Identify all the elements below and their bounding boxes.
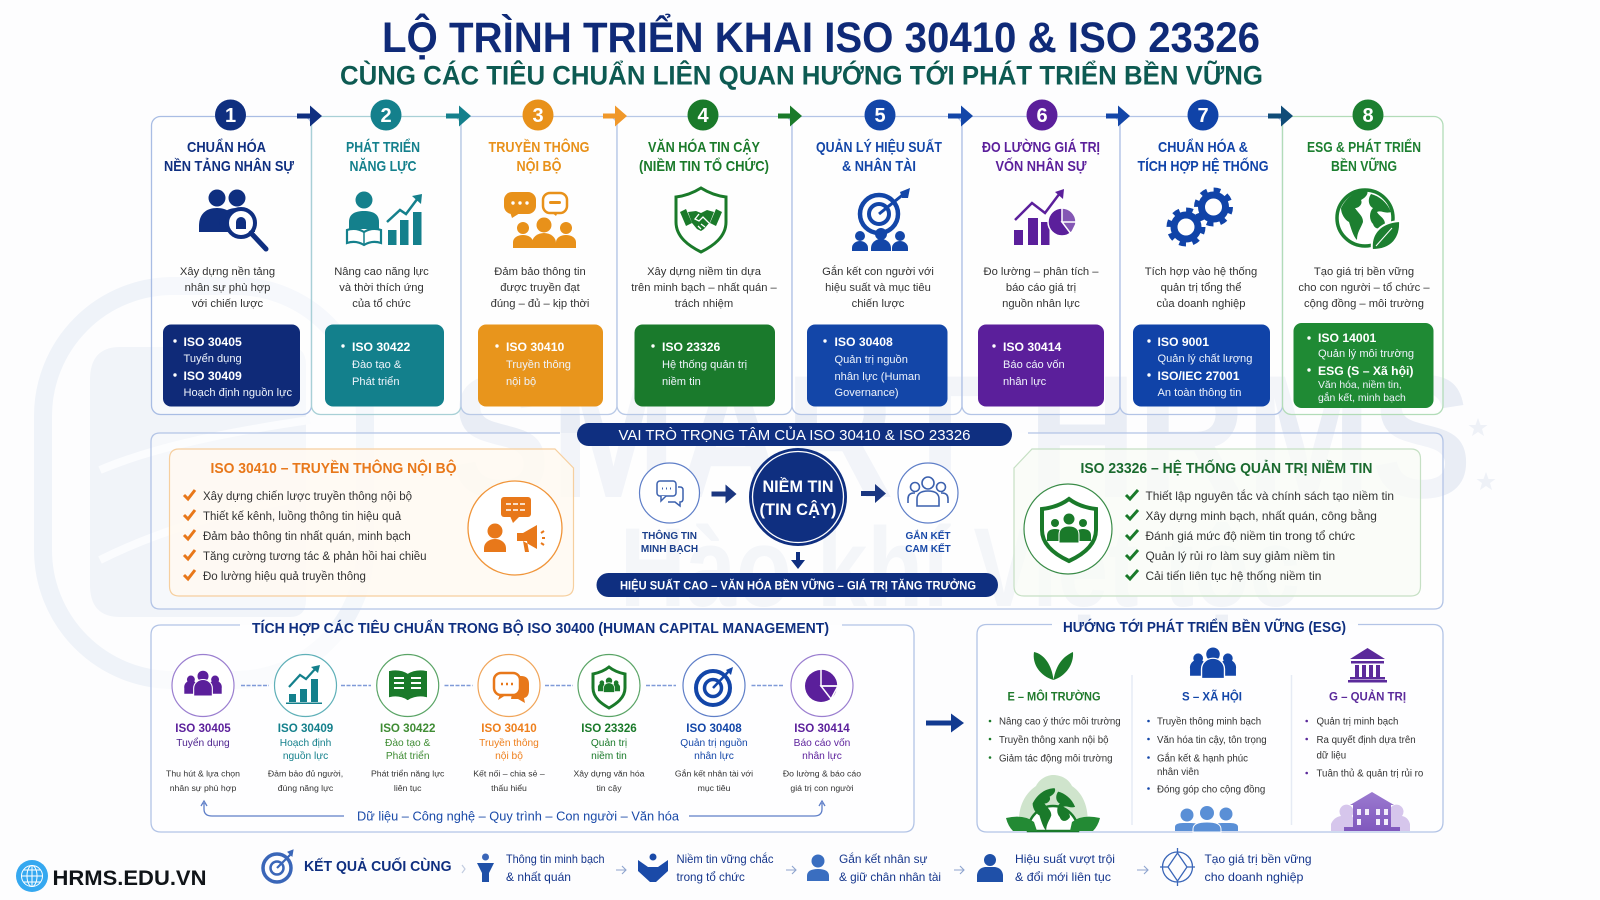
step 2 — [312, 100, 461, 414]
step 5: Gắn kết con người với — [822, 265, 934, 278]
icon: target and team — [852, 188, 910, 251]
item: ISO 23326: Xây dựng văn hóa — [573, 768, 645, 778]
icon: chart with pie — [1014, 189, 1077, 245]
item: ISO 30408: Quản trị nguồn — [680, 737, 748, 749]
step 5: Quản trị nguồn — [834, 354, 908, 366]
icon: transparent information — [640, 463, 700, 555]
column: social — [1147, 647, 1267, 832]
step 5: Governance) — [834, 387, 899, 399]
step 6: VỐN NHÂN SỰ — [996, 157, 1087, 175]
item: ISO 30405: Thu hút & lựa chọn — [166, 768, 240, 778]
outcome: engagement: & giữ chân nhân tài — [839, 871, 941, 884]
column: governance — [1305, 648, 1423, 831]
step 8: BỀN VỮNG — [1331, 157, 1397, 175]
step 5: hiệu suất và mục tiêu — [825, 282, 931, 294]
item: ISO 23326: niềm tin — [591, 750, 627, 762]
panel: ESG: HƯỚNG TỚI PHÁT TRIỂN BỀN VỮNG (ESG) — [1063, 618, 1346, 636]
outcome: sustainable value — [1160, 848, 1312, 886]
step 1: NỀN TẢNG NHÂN SỰ — [164, 157, 294, 175]
item: ISO 30410: Truyền thông — [479, 737, 539, 749]
item: ISO 30405: nhân sự phù hợp — [170, 783, 236, 793]
icon: globe with leaf — [1337, 190, 1400, 250]
step 4: VĂN HÓA TIN CẬY — [648, 138, 760, 156]
check list: Thiết kế kênh, luồng thông tin hiệu quả — [203, 511, 402, 523]
step 8: Tạo giá trị bền vững — [1314, 266, 1414, 278]
icon: learner with growth chart — [347, 192, 422, 245]
step 5 — [792, 100, 962, 414]
outcome pill: HIỆU SUẤT CAO – VĂN HÓA BỀN VỮNG – GIÁ TRỊ TĂNG TRƯỞNG — [620, 578, 976, 592]
step 5: nhân lực (Human — [834, 371, 920, 383]
column: governance: Tuân thủ & quản trị rủi ro — [1316, 768, 1423, 780]
check list: Xây dựng minh bạch, nhất quán, công bằng — [1146, 508, 1377, 523]
column: social: S – XÃ HỘI — [1182, 688, 1242, 704]
check list — [184, 490, 427, 583]
step 3: Đảm bảo thông tin — [494, 266, 586, 278]
step 5: ISO 30408 — [834, 335, 893, 349]
step 2: 2 — [380, 105, 392, 127]
panel: roadmap steps — [152, 100, 1443, 414]
heading pill: VAI TRÒ TRỌNG TÂM CỦA ISO 30410 & ISO 23326 — [618, 426, 970, 444]
step 1: CHUẨN HÓA — [187, 138, 266, 156]
check list: Cải tiến liên tục hệ thống niềm tin — [1146, 569, 1321, 583]
step 7: 7 — [1197, 105, 1209, 127]
icon: gears — [1169, 190, 1230, 244]
arrow to ESG — [926, 714, 964, 732]
icon: people with magnifier — [199, 190, 266, 249]
step 1: với chiến lược — [192, 298, 264, 310]
item: ISO 30422: Phát triển năng lực — [371, 768, 445, 778]
icon: green globe — [1006, 775, 1100, 831]
item: ISO 30409: nguồn lực — [283, 750, 328, 762]
icon: communication — [468, 481, 562, 575]
panel: ISO 30400 integration: TÍCH HỢP CÁC TIÊU CHUẨN TRONG BỘ ISO 30400 (HUMAN CAPITAL MANAGEMENT) — [252, 619, 829, 637]
icon: engagement: GẮN KẾT — [906, 529, 950, 542]
item: ISO 30408: ISO 30408 — [686, 722, 742, 735]
step 7: CHUẨN HÓA & — [1158, 138, 1248, 156]
outcome: performance: Hiệu suất vượt trội — [1015, 853, 1115, 866]
step 4: ISO 23326 — [662, 340, 720, 354]
column: social: Đóng góp cho cộng đồng — [1157, 784, 1265, 796]
step 1: nhân sự phù hợp — [185, 282, 270, 294]
item: ISO 23326: Quản trị — [591, 738, 627, 749]
trust circle: NIỀM TIN — [762, 477, 834, 496]
icon: blue people — [1175, 806, 1238, 832]
title: LỘ TRÌNH TRIỂN KHAI ISO 30410 & ISO 23326 — [382, 13, 1260, 62]
step 8: cho con người – tổ chức – — [1298, 282, 1430, 294]
item: ISO 30410: thấu hiểu — [491, 783, 527, 793]
logo: HRMS.EDU.VN — [16, 860, 206, 892]
step 1: 1 — [225, 105, 236, 127]
check list: Xây dựng chiến lược truyền thông nội bộ — [203, 491, 412, 503]
step 7: quản trị tổng thể — [1161, 282, 1241, 294]
check list: Đo lường hiệu quả truyền thông — [203, 571, 366, 583]
check list: Quản lý rủi ro làm suy giảm niềm tin — [1146, 549, 1335, 563]
outcome pill — [596, 573, 998, 597]
icon: purple building — [1331, 792, 1410, 831]
icon: transparent information: MINH BẠCH — [641, 544, 698, 555]
item: ISO 30422: Phát triển — [386, 750, 430, 762]
step 6: nhân lực — [1003, 376, 1047, 388]
item: ISO 30422: ISO 30422 — [380, 722, 435, 735]
step 8: gắn kết, minh bạch — [1318, 391, 1406, 404]
data foundation bracket — [201, 801, 825, 824]
item: ISO 30414: giá trị con người — [790, 783, 854, 793]
step 7: của doanh nghiệp — [1157, 298, 1245, 310]
step 3 — [461, 100, 617, 414]
column: social: Văn hóa tin cậy, tôn trọng — [1157, 735, 1267, 746]
icon: speech bubbles and team — [504, 192, 576, 248]
step 5: chiến lược — [852, 298, 905, 310]
check list: Thiết lập nguyên tắc và chính sách tạo niềm tin — [1146, 488, 1394, 503]
step 6: báo cáo giá trị — [1006, 282, 1076, 294]
panel: central role — [151, 423, 1443, 609]
column: governance: G – QUẢN TRỊ — [1329, 688, 1406, 704]
check list: Đảm bảo thông tin nhất quán, minh bạch — [203, 531, 411, 543]
outcome: performance — [977, 853, 1115, 884]
trust circle: (TIN CẬY) — [760, 500, 836, 519]
data foundation bracket: Dữ liệu – Công nghệ – Quy trình – Con người – Văn hóa — [357, 810, 679, 824]
step 2: Đào tạo & — [352, 359, 402, 371]
step 7: An toàn thông tin — [1158, 387, 1241, 399]
step 7: Quản lý chất lượng — [1158, 353, 1252, 365]
step 1: ISO 30409 — [184, 369, 242, 383]
item: ISO 30408: mục tiêu — [698, 783, 731, 793]
outcome: performance: & đổi mới liên tục — [1015, 871, 1111, 884]
heading pill — [577, 423, 1012, 446]
watermark background: Hào khí Việt tộc — [620, 505, 1300, 630]
item: ISO 30409: Đảm bảo đủ người, — [268, 768, 343, 778]
outcome: trust: trong tổ chức — [676, 871, 745, 884]
outcome: sustainable value: Tạo giá trị bền vững — [1204, 853, 1312, 866]
step 8: ESG (S – Xã hội) — [1318, 364, 1414, 378]
card: ISO 23326 — [1014, 449, 1420, 596]
item: ISO 23326 — [573, 654, 645, 793]
step 7: Tích hợp vào hệ thống — [1145, 266, 1257, 278]
column: social: Gắn kết & hạnh phúc — [1157, 754, 1248, 764]
step 8: cộng đồng – môi trường — [1304, 298, 1424, 310]
outcome: information: & nhất quán — [506, 871, 571, 884]
step 8: 8 — [1362, 105, 1374, 127]
card: ISO 30410: ISO 30410 – TRUYỀN THÔNG NỘI BỘ — [210, 459, 457, 477]
step 6: ISO 30414 — [1003, 340, 1061, 354]
outcome: trust: Niềm tin vững chắc — [676, 853, 774, 866]
column: governance: Quản trị minh bạch — [1316, 716, 1398, 728]
subtitle: CÙNG CÁC TIÊU CHUẨN LIÊN QUAN HƯỚNG TỚI PHÁT TRIỂN BỀN VỮNG — [340, 60, 1263, 90]
outcome: trust — [638, 853, 774, 884]
card: ISO 30410 — [170, 449, 574, 596]
item: ISO 30422 — [371, 654, 445, 793]
item: ISO 30405 — [166, 654, 240, 793]
card: ISO 23326: ISO 23326 – HỆ THỐNG QUẢN TRỊ NIỀM TIN — [1080, 459, 1372, 477]
icon: shield with team — [1024, 484, 1112, 574]
step 4: 4 — [697, 105, 709, 127]
column: environment — [989, 652, 1121, 831]
column: governance: Ra quyết định dựa trên — [1316, 735, 1416, 746]
step 7: TÍCH HỢP HỆ THỐNG — [1138, 157, 1268, 175]
icon: engagement — [898, 463, 958, 555]
step 1: ISO 30405 — [184, 335, 242, 349]
step 8 — [1282, 100, 1443, 414]
item: ISO 30410: nội bộ — [495, 751, 523, 762]
step 7: ISO/IEC 27001 — [1158, 369, 1240, 383]
step 3: ISO 30410 — [506, 340, 564, 354]
check list — [1126, 488, 1394, 583]
step 2: ISO 30422 — [352, 340, 410, 354]
step 1: Xây dựng nền tảng — [180, 266, 275, 278]
step 3: đúng – đủ – kịp thời — [491, 298, 589, 310]
item: ISO 30414 — [783, 654, 861, 793]
item: ISO 30408: nhân lực — [694, 751, 734, 762]
item: ISO 30410: Kết nối – chia sẻ – — [473, 768, 545, 778]
step 6: ĐO LƯỜNG GIÁ TRỊ — [982, 138, 1100, 156]
step 4 — [617, 100, 792, 414]
step 1: Tuyển dụng — [184, 353, 242, 365]
step 2: Nâng cao năng lực — [334, 266, 429, 278]
step 4: trách nhiệm — [675, 298, 733, 310]
step 3: nội bộ — [506, 376, 536, 388]
step 8: ESG & PHÁT TRIỂN — [1307, 138, 1421, 156]
step 3: TRUYỀN THÔNG — [488, 138, 590, 156]
panel: ISO 30400 integration — [151, 619, 914, 832]
step 5: 5 — [874, 105, 886, 127]
icon: engagement: CAM KẾT — [905, 542, 951, 555]
step 4: Hệ thống quản trị — [662, 359, 747, 371]
item: ISO 30422: Đào tạo & — [385, 738, 431, 749]
item: ISO 30414: ISO 30414 — [794, 722, 850, 735]
column: environment: E – MÔI TRƯỜNG — [1008, 688, 1100, 704]
column: environment: Giảm tác động môi trường — [999, 754, 1113, 764]
outcome: sustainable value: cho doanh nghiệp — [1204, 871, 1304, 884]
icon: shield with handshake — [676, 188, 726, 252]
step 5: & NHÂN TÀI — [842, 157, 916, 175]
step 6: nguồn nhân lực — [1002, 298, 1080, 310]
item: ISO 30409: ISO 30409 — [278, 722, 334, 735]
item: ISO 30414: Báo cáo vốn — [794, 737, 850, 749]
icon: transparent information: THÔNG TIN — [642, 529, 697, 542]
step 1 — [152, 100, 312, 414]
step 8: Văn hóa, niềm tin, — [1318, 379, 1402, 391]
item: ISO 30409: đúng năng lực — [278, 783, 334, 793]
step 3: Truyền thông — [506, 359, 571, 371]
item: ISO 30405: ISO 30405 — [175, 722, 231, 735]
item: ISO 30409 — [268, 654, 343, 793]
watermark background — [43, 286, 1496, 680]
icon: people — [1190, 647, 1236, 678]
step 1: Hoạch định nguồn lực — [184, 387, 293, 399]
step 3: được truyền đạt — [500, 282, 581, 294]
outcome: information: Thông tin minh bạch — [506, 853, 604, 866]
panel: ESG — [977, 618, 1443, 832]
step 8: ISO 14001 — [1318, 331, 1376, 345]
icon: leaves — [1034, 652, 1073, 680]
flow: trust — [596, 448, 998, 597]
dashed connectors — [241, 684, 784, 686]
icon: target — [263, 850, 293, 882]
icon: institution — [1348, 648, 1387, 682]
item: ISO 30410 — [473, 654, 545, 793]
item: ISO 30405: Tuyển dụng — [176, 737, 230, 749]
trust circle — [749, 448, 847, 546]
logo: HRMS.EDU.VN: HRMS.EDU.VN — [52, 866, 206, 890]
step 3: 3 — [532, 105, 544, 127]
column: social: nhân viên — [1157, 767, 1199, 778]
step 6 — [962, 100, 1120, 414]
step 6: Đo lường – phân tích – — [984, 266, 1099, 278]
item: ISO 30414: nhân lực — [802, 751, 842, 762]
step 2: Phát triển — [352, 376, 399, 388]
check list: Đánh giá mức độ niềm tin trong tổ chức — [1146, 529, 1355, 543]
column: social: Truyền thông minh bạch — [1157, 716, 1261, 728]
item: ISO 23326: ISO 23326 — [581, 722, 637, 735]
final outcomes bar — [263, 848, 1312, 886]
step 4: niềm tin — [662, 376, 701, 388]
step 6: Báo cáo vốn — [1003, 359, 1065, 371]
item: ISO 30410: ISO 30410 — [481, 722, 537, 735]
step 7 — [1120, 100, 1282, 414]
item: ISO 30408 — [675, 654, 753, 793]
step 5: QUẢN LÝ HIỆU SUẤT — [816, 138, 942, 156]
step 2: và thời thích ứng — [339, 282, 424, 294]
item: ISO 30408: Gắn kết nhân tài với — [675, 768, 753, 778]
step 2: NĂNG LỰC — [350, 158, 417, 175]
column: environment: Truyền thông xanh nội bộ — [999, 735, 1109, 746]
step 8: Quản lý môi trường — [1318, 348, 1414, 360]
column: governance: dữ liệu — [1316, 750, 1346, 762]
step 4: (NIỀM TIN TỔ CHỨC) — [639, 157, 769, 175]
step 7: ISO 9001 — [1158, 335, 1209, 349]
check list: Tăng cường tương tác & phản hồi hai chiều — [203, 551, 427, 563]
outcome: information — [477, 853, 604, 884]
outcome: engagement: Gắn kết nhân sự — [839, 853, 928, 866]
step 2: của tổ chức — [352, 298, 411, 310]
step arrows — [297, 106, 1293, 126]
item: ISO 30422: liên tục — [394, 783, 422, 793]
item: ISO 30409: Hoạch định — [280, 738, 331, 749]
step 4: trên minh bạch – nhất quán – — [631, 282, 778, 294]
final outcomes bar: KẾT QUẢ CUỐI CÙNG — [304, 857, 452, 875]
item: ISO 30414: Đo lường & báo cáo — [783, 768, 861, 778]
step 6: 6 — [1036, 105, 1048, 127]
column: environment: Nâng cao ý thức môi trường — [999, 716, 1121, 728]
item: ISO 23326: tin cậy — [596, 783, 622, 793]
step 4: Xây dựng niềm tin dựa — [647, 266, 762, 278]
step 2: PHÁT TRIỂN — [346, 138, 420, 156]
outcome: engagement — [807, 853, 941, 884]
step 3: NỘI BỘ — [516, 157, 562, 175]
